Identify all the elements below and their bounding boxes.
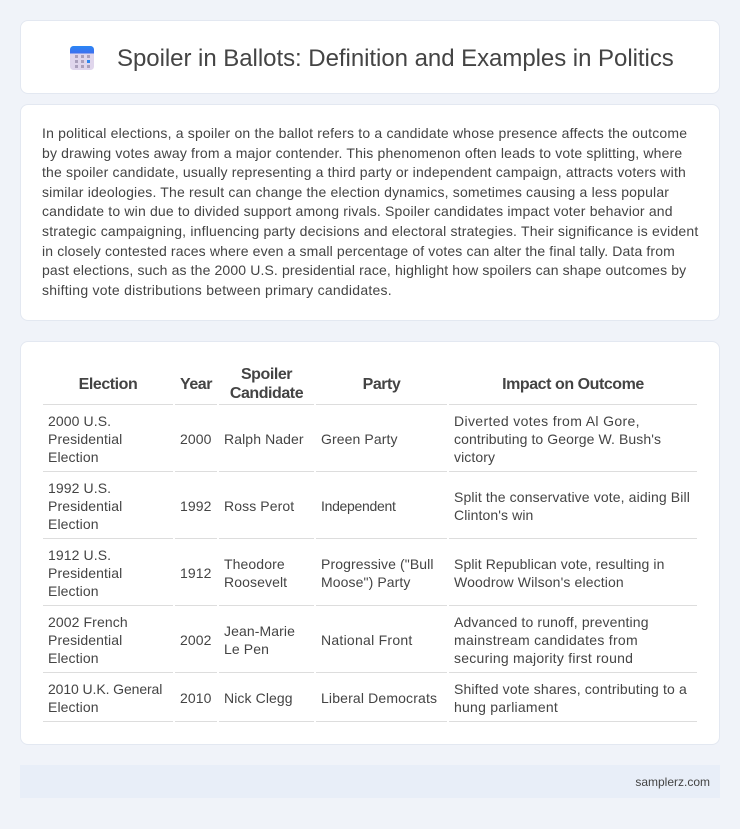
table: spoiler examples <box>43 366 697 722</box>
table: spoiler examples: Party <box>363 376 400 392</box>
table: spoiler examples: Theodore <box>224 556 285 572</box>
table: spoiler examples: Impact on Outcome <box>502 376 644 392</box>
table: spoiler examples: Le Pen <box>224 641 269 657</box>
title: Spoiler in Ballots: Definition and Examples in Politics <box>117 45 674 72</box>
table: spoiler examples: 2002 <box>180 632 212 648</box>
table: spoiler examples: Advanced to runoff, preventing <box>454 614 649 630</box>
table: spoiler examples: securing majority first round <box>454 650 633 666</box>
table: spoiler examples: Split the conservative vote, aiding Bill <box>454 489 690 505</box>
table: spoiler examples: Green Party <box>321 431 398 447</box>
table: spoiler examples: Diverted votes from Al Gore, <box>454 413 640 429</box>
table: spoiler examples: contributing to George W. Bush's <box>454 431 661 447</box>
table: spoiler examples: Roosevelt <box>224 574 287 590</box>
panel: table of spoiler candidates <box>20 341 720 745</box>
table: spoiler examples: Election <box>48 699 99 715</box>
text block: introduction paragraph: past elections, such as the 2000 U.S. presidential race, highlight how spoilers can shape outcomes by <box>42 262 686 278</box>
table: spoiler examples: Election <box>48 650 99 666</box>
table: spoiler examples: 2000 <box>180 431 212 447</box>
table: spoiler examples: mainstream candidates from <box>454 632 638 648</box>
table: spoiler examples: 1912 U.S. <box>48 547 111 563</box>
table: spoiler examples: Shifted vote shares, contributing to a <box>454 681 687 697</box>
table: spoiler examples: Clinton's win <box>454 507 533 523</box>
table: spoiler examples: Independent <box>321 498 396 514</box>
text block: introduction paragraph: in closely contested races where even a small percentage of votes can alter the final tally. Data from <box>42 243 675 259</box>
table: spoiler examples: Liberal Democrats <box>321 690 437 706</box>
table: spoiler examples: 1992 U.S. <box>48 480 111 496</box>
table: spoiler examples: Presidential <box>48 498 122 514</box>
text block: introduction paragraph: by drawing votes away from a major contender. This phenomenon often leads to vote splitting, where <box>42 145 682 161</box>
table: spoiler examples: Woodrow Wilson's election <box>454 574 624 590</box>
text block: introduction paragraph: strategic campaigning, influencing party decisions and electoral strategies. Their significance is evident <box>42 223 698 239</box>
table: spoiler examples: Nick Clegg <box>224 690 293 706</box>
table: spoiler examples: 2000 U.S. <box>48 413 111 429</box>
table: spoiler examples: Candidate <box>230 385 303 402</box>
text block: introduction paragraph: the spoiler candidate, usually representing a third party or independent campaign, attracts voters with <box>42 164 686 180</box>
table: spoiler examples: Split Republican vote, resulting in <box>454 556 665 572</box>
table: spoiler examples: 2010 U.K. General <box>48 681 162 697</box>
table: spoiler examples: Election <box>48 583 99 599</box>
table: spoiler examples: Presidential <box>48 565 122 581</box>
table: spoiler examples: 1992 <box>180 498 212 514</box>
panel: introduction <box>20 104 720 321</box>
table: spoiler examples: Election <box>48 516 99 532</box>
table: spoiler examples: Presidential <box>48 632 122 648</box>
table: spoiler examples: victory <box>454 449 495 465</box>
table: spoiler examples: hung parliament <box>454 699 558 715</box>
table: spoiler examples: Progressive ("Bull <box>321 556 434 572</box>
table: spoiler examples: Year <box>180 376 212 392</box>
table: spoiler examples: Jean-Marie <box>224 623 295 639</box>
icon: ballot calendar <box>70 46 94 70</box>
table: spoiler examples: National Front <box>321 632 413 648</box>
table: spoiler examples: Spoiler <box>241 366 292 383</box>
text block: introduction paragraph: candidate to win due to divided support among rivals. Spoiler candidates impact voter behavior and <box>42 203 673 219</box>
table: spoiler examples: Election <box>48 449 99 465</box>
table: spoiler examples: 2002 French <box>48 614 128 630</box>
text block: introduction paragraph <box>42 125 698 298</box>
table: spoiler examples: Election <box>79 376 137 392</box>
header panel <box>20 20 720 94</box>
table: spoiler examples: Presidential <box>48 431 122 447</box>
footer: samplerz.com <box>635 775 710 789</box>
table: spoiler examples: Ross Perot <box>224 498 294 514</box>
table: spoiler examples: Ralph Nader <box>224 431 304 447</box>
text block: introduction paragraph: similar ideologies. The result can change the election dynamics, sometimes causing a less popular <box>42 184 669 200</box>
text block: introduction paragraph: In political elections, a spoiler on the ballot refers to a candidate whose presence affects the outcome <box>42 125 687 141</box>
table: spoiler examples: 1912 <box>180 565 212 581</box>
table: spoiler examples: Moose") Party <box>321 574 411 590</box>
footer <box>20 765 720 798</box>
text block: introduction paragraph: shifting vote distributions between primary candidates. <box>42 282 392 298</box>
table: spoiler examples: 2010 <box>180 690 212 706</box>
